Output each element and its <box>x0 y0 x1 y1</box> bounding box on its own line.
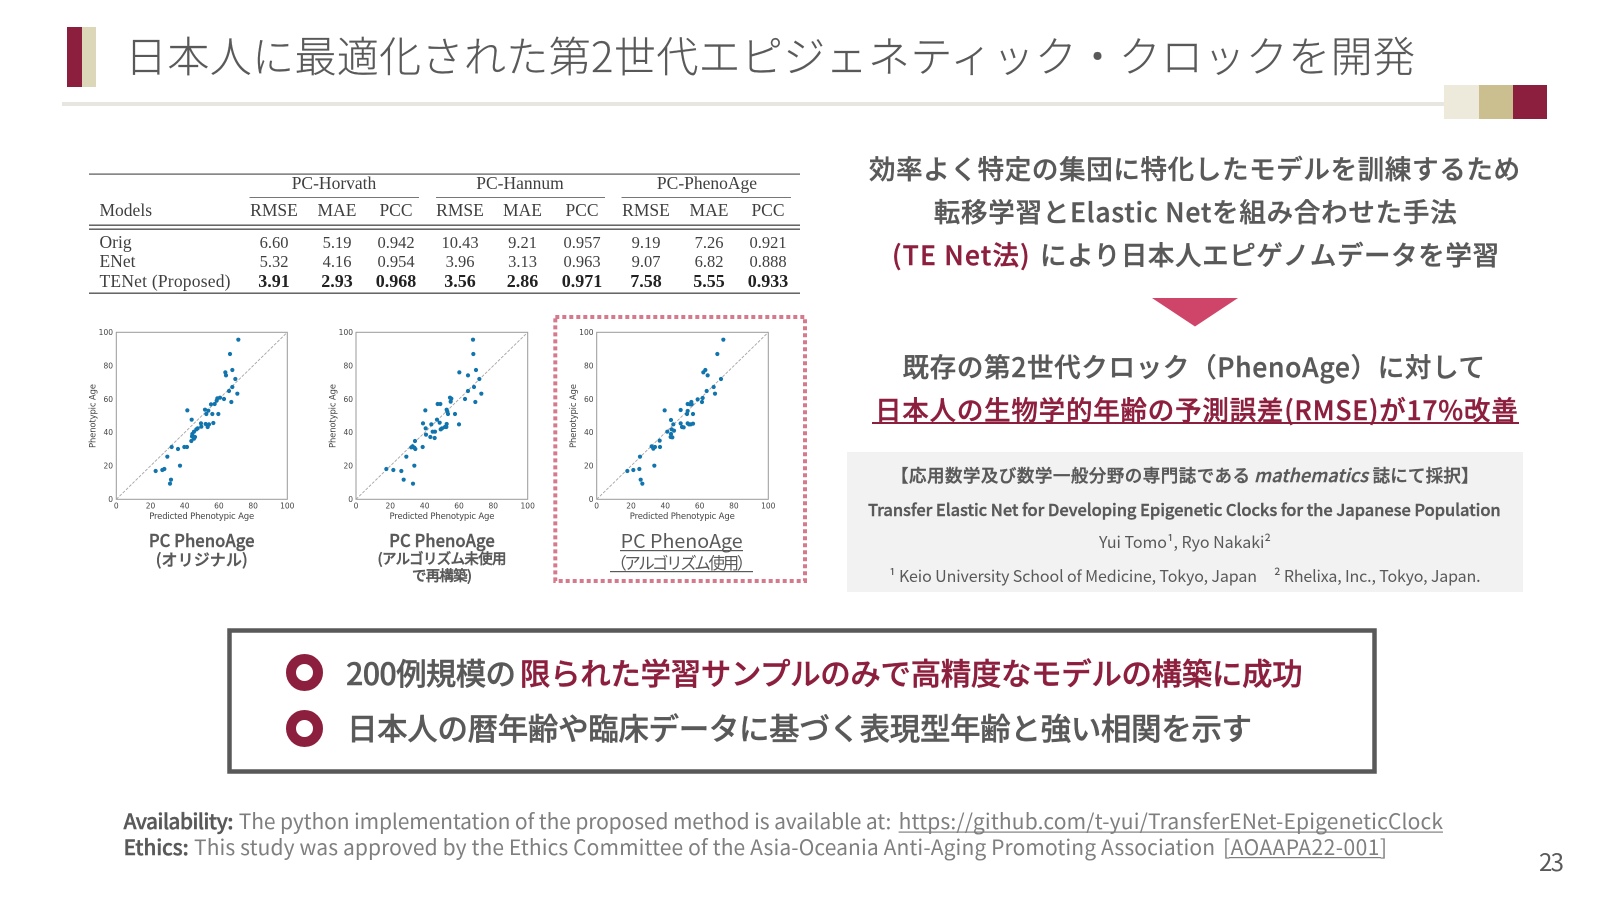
page number: 23 <box>1539 843 1564 878</box>
scatter plot: PC PhenoAge original: Phenotypic Age <box>88 384 98 448</box>
panel: publication details: ² Rhelixa, Inc., Tokyo, Japan. <box>1274 563 1481 587</box>
results table: PC-PhenoAge <box>657 173 757 193</box>
results table: PCC <box>379 200 413 220</box>
scatter plot: PC PhenoAge original: 100 <box>99 328 113 337</box>
scatter plot: PC PhenoAge with algorithm: 60 <box>695 502 705 510</box>
method description: 転移学習とElastic Netを組み合わせた手法 <box>934 191 1457 230</box>
result statement: 日本人の生物学的年齢の予測誤差(RMSE)が17%改善 <box>875 389 1518 428</box>
results table: MAE <box>690 200 728 220</box>
scatter plot: PC PhenoAge without algorithm: Predicted Phenotypic Age <box>390 512 494 522</box>
icon: bullet 2 <box>291 715 318 742</box>
results table: 6.82 <box>695 252 723 271</box>
arrow: down triangle <box>1152 298 1238 326</box>
results table: 3.13 <box>508 252 537 271</box>
scatter plot: PC PhenoAge original: 60 <box>214 502 224 510</box>
results table: 9.07 <box>632 252 660 271</box>
panel: publication details: mathematics <box>1254 462 1370 488</box>
results table: MAE <box>318 200 356 220</box>
results table: 7.58 <box>630 271 662 291</box>
footnote: availability <box>124 806 1443 836</box>
method description: (TE Net法) <box>892 234 1030 273</box>
footnote: availability: The python implementation of the proposed method is available at: <box>239 806 891 836</box>
scatter plot: PC PhenoAge without algorithm: 20 <box>386 502 395 510</box>
caption: with algorithm <box>610 527 753 574</box>
scatter plot: PC PhenoAge original: 60 <box>103 395 113 404</box>
scatter plot: PC PhenoAge with algorithm: 80 <box>584 361 594 370</box>
scatter plot: PC PhenoAge original: 0 <box>108 495 113 504</box>
footnote: availability: Availability: <box>124 806 234 836</box>
results table: 2.93 <box>321 271 353 291</box>
results table: 2.86 <box>507 271 538 291</box>
scatter plot: PC PhenoAge without algorithm: 60 <box>343 395 353 404</box>
panel: publication details: Transfer Elastic Net for Developing Epigenetic Clocks for the Japanese Population <box>868 497 1501 521</box>
caption: without algorithm: PC PhenoAge <box>389 528 495 553</box>
results table: 0.921 <box>749 233 787 252</box>
results table: Models <box>100 200 152 220</box>
results table: 3.56 <box>444 271 476 291</box>
scatter plot: PC PhenoAge original: Predicted Phenotypic Age <box>149 512 254 522</box>
title: 日本人に最適化された第2世代エピジェネティック・クロックを開発 <box>125 24 1415 85</box>
caption: original: PC PhenoAge <box>149 528 255 553</box>
scatter plot: PC PhenoAge without algorithm: Phenotypic Age <box>328 384 338 448</box>
scatter plot: PC PhenoAge original: 0 <box>114 502 119 510</box>
caption: without algorithm <box>378 528 506 586</box>
scatter plot: PC PhenoAge original: 80 <box>248 502 258 510</box>
finding 2: 日本人の暦年齢や臨床データに基づく表現型年齢と強い相関を示す <box>347 705 1252 749</box>
finding 1: 限られた学習サンプルのみで高精度なモデルの構築に成功 <box>520 650 1303 694</box>
scatter plot: PC PhenoAge with algorithm: 0 <box>589 495 594 504</box>
results table: RMSE <box>622 200 670 220</box>
method description: 効率よく特定の集団に特化したモデルを訓練するため <box>869 148 1520 187</box>
caption: with algorithm: PC PhenoAge <box>621 527 743 554</box>
scatter plot: PC PhenoAge with algorithm: Phenotypic Age <box>569 384 579 448</box>
results table: 0.888 <box>749 252 787 271</box>
results table: TENet (Proposed) <box>100 271 231 291</box>
footnote: availability: https://github.com/t-yui/TransferENet-EpigeneticClock <box>899 806 1443 836</box>
scatter plot: PC PhenoAge without algorithm: 80 <box>343 361 353 370</box>
scatter plot: PC PhenoAge with algorithm <box>569 328 776 522</box>
panel: publication details <box>847 452 1523 592</box>
panel: key findings <box>230 630 1374 772</box>
results table: 5.19 <box>323 233 351 252</box>
results table: 3.91 <box>258 271 290 291</box>
scatter plot: PC PhenoAge original <box>88 328 295 522</box>
results table: 10.43 <box>441 233 479 252</box>
scatter plot: PC PhenoAge original: 100 <box>280 502 295 510</box>
results table: 7.26 <box>695 233 723 252</box>
scatter plot: PC PhenoAge with algorithm: 40 <box>661 502 670 510</box>
scatter plot: PC PhenoAge without algorithm: 20 <box>343 462 353 471</box>
results table: 5.32 <box>260 252 288 271</box>
scatter plot: PC PhenoAge with algorithm: 80 <box>729 502 739 510</box>
scatter plot: PC PhenoAge with algorithm: 20 <box>626 502 636 510</box>
scatter plot: PC PhenoAge original: 80 <box>103 361 113 370</box>
scatter plot: PC PhenoAge without algorithm: 60 <box>454 502 464 510</box>
scatter plot: PC PhenoAge with algorithm: 100 <box>761 502 776 510</box>
header corner tiles <box>1444 85 1547 119</box>
results table: PCC <box>565 200 599 220</box>
results table: 0.933 <box>748 271 788 291</box>
scatter plot: PC PhenoAge without algorithm: 100 <box>339 328 353 337</box>
results table: PC-Horvath <box>292 173 377 193</box>
results table: 9.21 <box>508 233 537 252</box>
scatter plot: PC PhenoAge with algorithm: 20 <box>584 462 594 471</box>
results table: 3.96 <box>446 252 474 271</box>
results table: Orig <box>100 232 132 252</box>
scatter plot: PC PhenoAge without algorithm: 40 <box>343 428 353 437</box>
footnote: ethics: Ethics: <box>124 832 189 862</box>
scatter plot: PC PhenoAge with algorithm: 100 <box>579 328 594 337</box>
results table: PC-Hannum <box>476 173 564 193</box>
scatter plot: PC PhenoAge without algorithm: 0 <box>354 502 359 510</box>
caption: original: (オリジナル) <box>156 546 248 570</box>
result statement: 既存の第2世代クロック（PhenoAge）に対して <box>902 346 1485 385</box>
panel: publication details: Yui Tomo¹, Ryo Nakaki² <box>1098 529 1271 553</box>
scatter plot: PC PhenoAge without algorithm: 40 <box>420 502 430 510</box>
scatter plot: PC PhenoAge without algorithm: 0 <box>348 495 353 504</box>
scatter plot: PC PhenoAge with algorithm: 0 <box>594 502 599 510</box>
scatter plot: PC PhenoAge with algorithm: 40 <box>584 428 594 437</box>
results table: 0.954 <box>377 252 415 271</box>
results table: PCC <box>751 200 785 220</box>
results table: 0.968 <box>376 271 416 291</box>
panel: publication details: 【応用数学及び数学一般分野の専門誌である <box>891 463 1250 488</box>
caption: without algorithm: で再構築) <box>412 565 472 586</box>
result statement <box>872 346 1519 428</box>
caption: original <box>149 528 255 570</box>
footnote: ethics: [AOAAPA22-001] <box>1223 832 1387 862</box>
panel: publication details: 誌にて採択】 <box>1373 463 1479 488</box>
scatter plot: PC PhenoAge without algorithm <box>328 328 535 522</box>
results table: 0.963 <box>563 252 601 271</box>
results table: 0.957 <box>563 233 601 252</box>
icon: bullet 1 <box>291 659 318 686</box>
scatter plot: PC PhenoAge with algorithm: 60 <box>584 395 594 404</box>
header accent bar <box>67 27 96 87</box>
results table: MAE <box>503 200 542 220</box>
scatter plot: PC PhenoAge without algorithm: 100 <box>521 502 535 510</box>
highlight: dashed box around proposed algorithm <box>555 317 805 581</box>
results table: 5.55 <box>693 271 725 291</box>
panel: publication details: ¹ Keio University School of Medicine, Tokyo, Japan <box>889 563 1257 587</box>
results table: 0.942 <box>377 233 415 252</box>
caption: with algorithm: （アルゴリズム使用） <box>610 550 753 574</box>
finding 1: 200例規模の <box>346 650 516 694</box>
results table <box>89 173 800 294</box>
scatter plot: PC PhenoAge original: 40 <box>180 502 190 510</box>
scatter plot: PC PhenoAge original: 20 <box>146 502 155 510</box>
scatter plot: PC PhenoAge with algorithm: Predicted Phenotypic Age <box>630 512 735 522</box>
method description: により日本人エピゲノムデータを学習 <box>1040 234 1499 273</box>
results table: 4.16 <box>323 252 351 271</box>
results table: RMSE <box>250 200 298 220</box>
footnote: ethics: This study was approved by the Ethics Committee of the Asia-Oceania Anti-Aging Promoting Association <box>194 832 1215 862</box>
caption: without algorithm: (アルゴリズム未使用 <box>378 548 506 569</box>
results table: RMSE <box>436 200 484 220</box>
scatter plot: PC PhenoAge original: 20 <box>103 462 113 471</box>
results table: 0.971 <box>562 271 602 291</box>
results table: ENet <box>100 251 136 271</box>
results table: 9.19 <box>632 233 660 252</box>
method description <box>869 148 1520 273</box>
scatter plot: PC PhenoAge original: 40 <box>103 428 113 437</box>
scatter plot: PC PhenoAge without algorithm: 80 <box>489 502 498 510</box>
results table: 6.60 <box>260 233 288 252</box>
